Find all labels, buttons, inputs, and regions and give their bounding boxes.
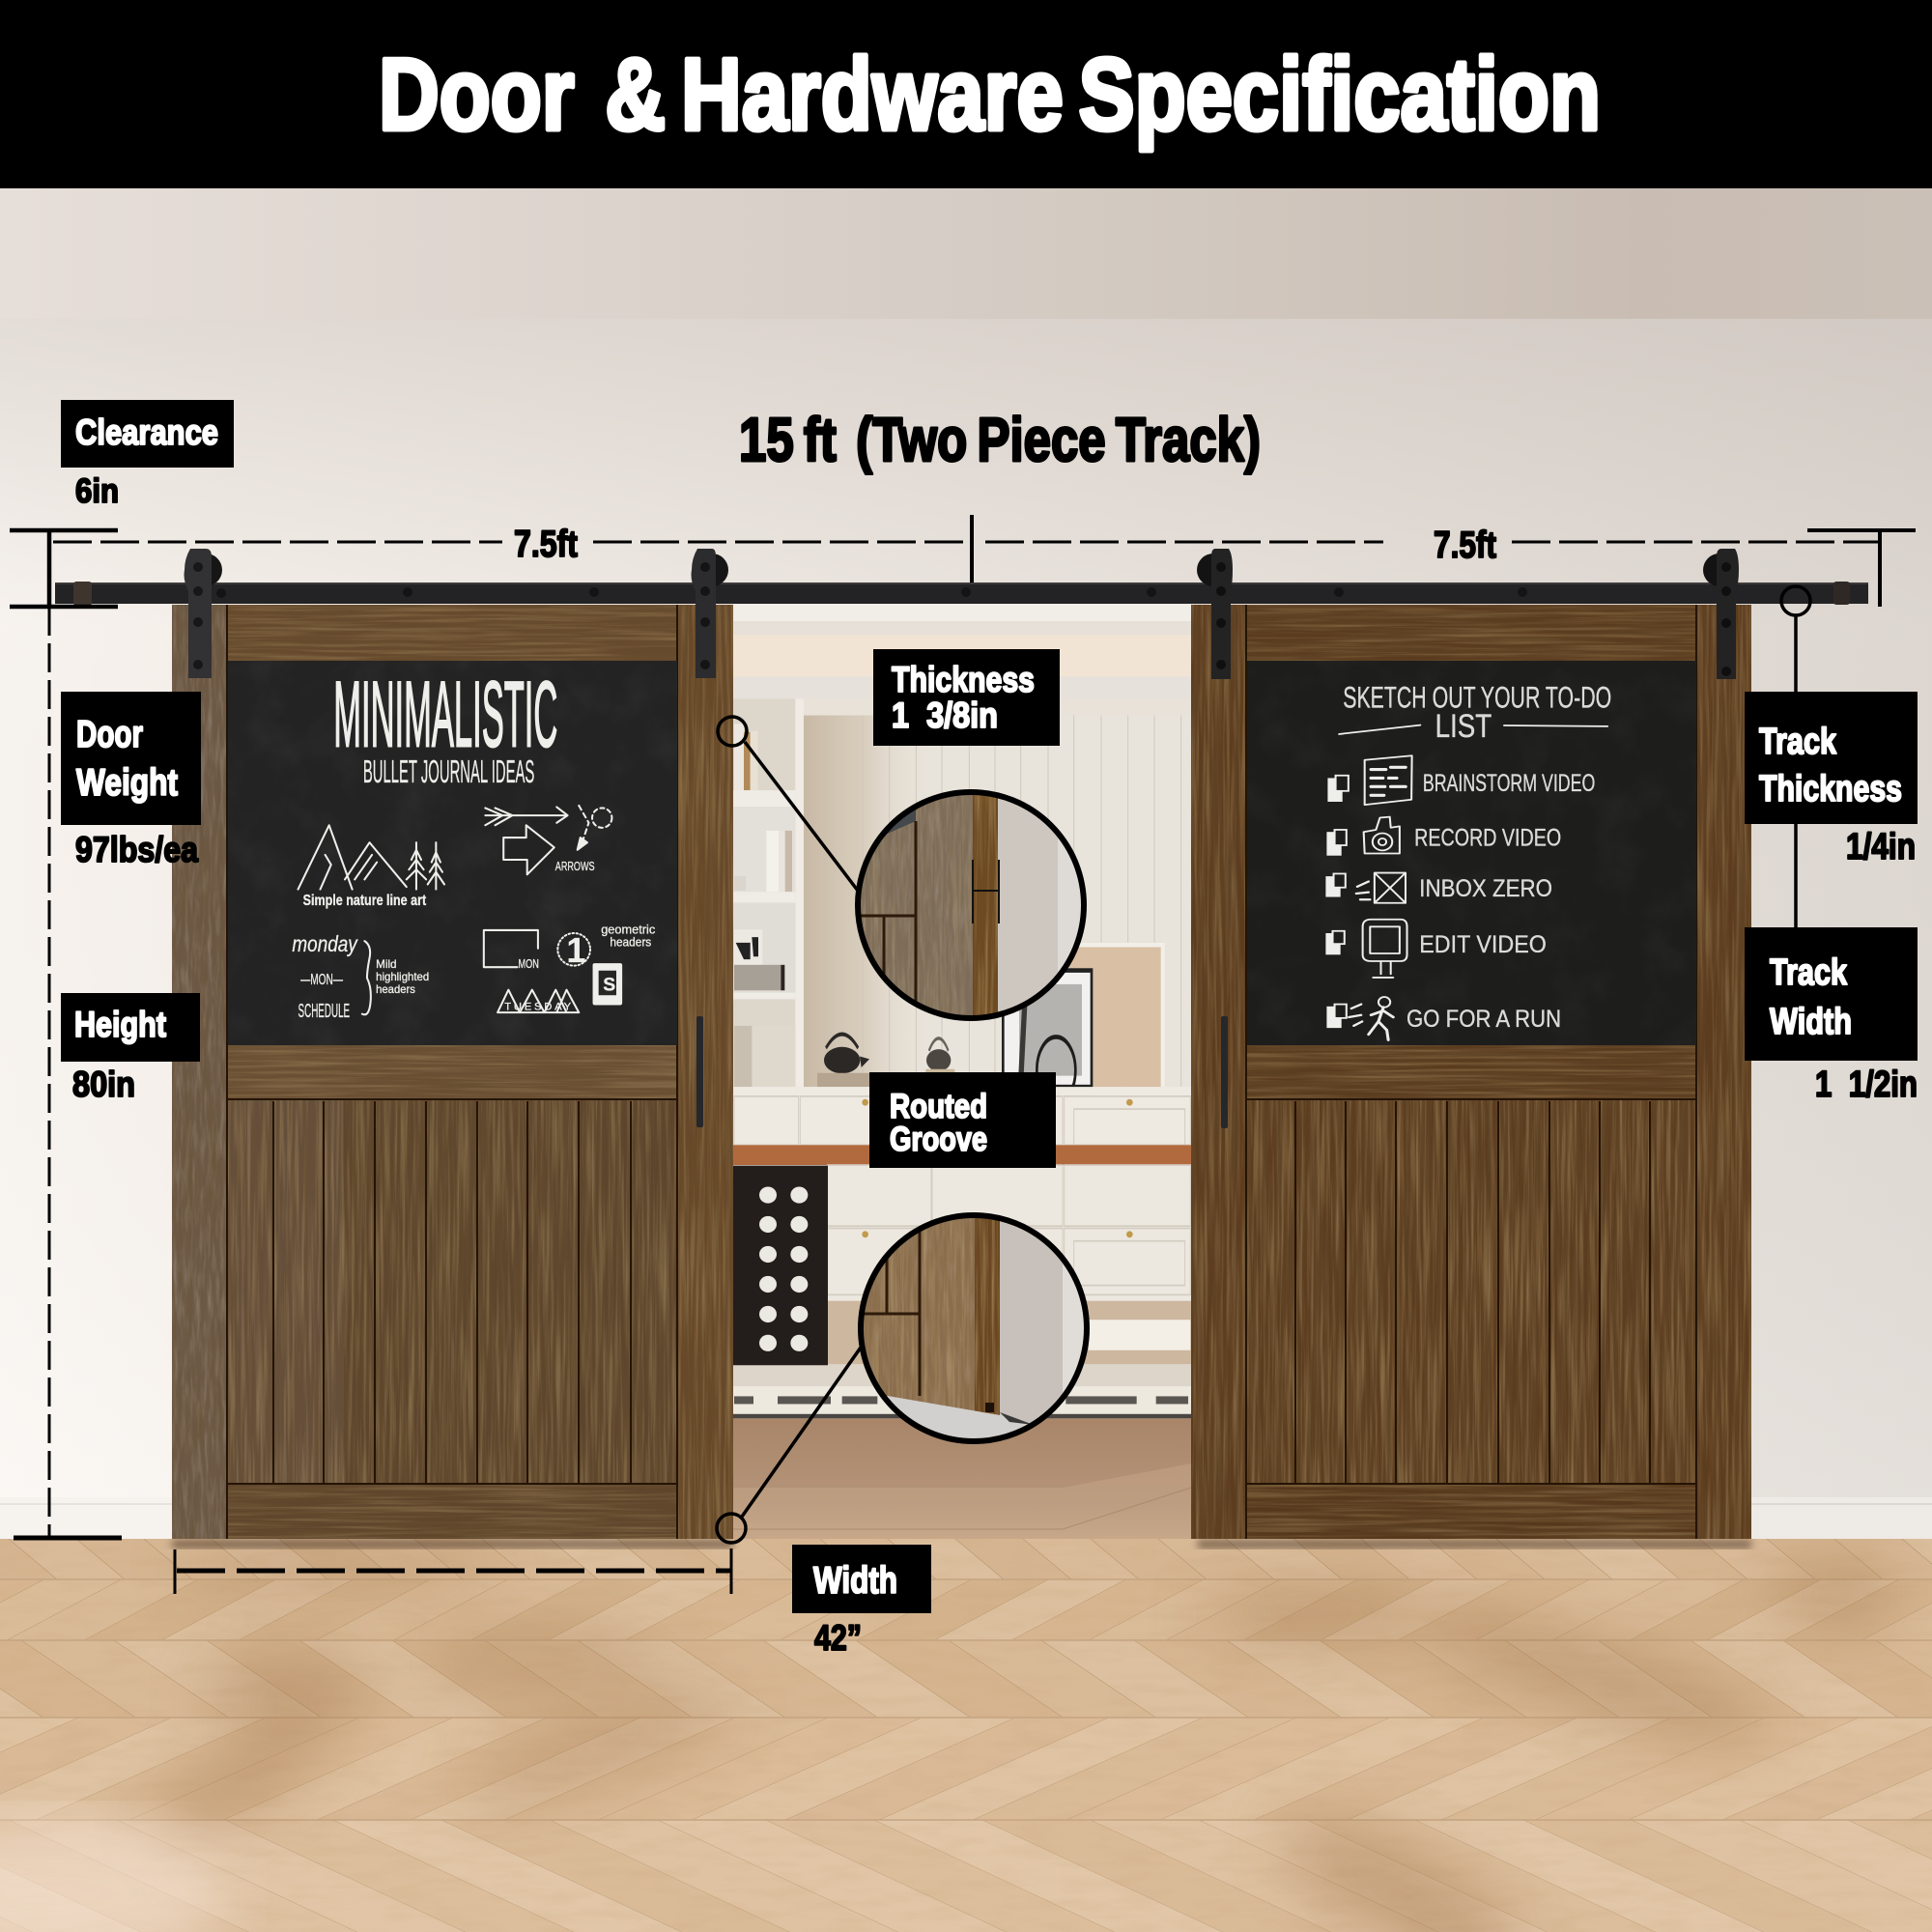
left door handle <box>696 1016 703 1127</box>
callout: routed groove: Routed <box>890 1088 987 1125</box>
chalk geometric headers sample: geometric <box>601 922 656 936</box>
left barn door <box>172 605 733 1539</box>
chalk schedule sample: headers <box>376 982 415 996</box>
title: Door & Hardware Specification <box>379 38 1601 152</box>
title bar <box>0 0 1932 188</box>
left door bottom rail <box>228 1484 677 1539</box>
hanger strap 1 <box>184 549 222 678</box>
chalk schedule sample: Mild <box>376 957 397 971</box>
background wall and ceiling <box>0 188 1932 1546</box>
callout: track thickness: Track <box>1759 722 1837 762</box>
chalkboard: sketch out your to-do list <box>1247 661 1696 1045</box>
chalk arrows <box>485 806 611 874</box>
to-do rows: RECORD VIDEO <box>1414 824 1561 851</box>
track length heading: 15 ft (Two Piece Track) <box>739 405 1261 474</box>
callout: thickness: Thickness <box>892 660 1035 699</box>
left door floor shadow <box>172 1540 733 1548</box>
leader: door bottom to groove magnifier <box>717 1345 863 1543</box>
dimension: 7.5 ft right segment: 7.5ft <box>1434 525 1496 566</box>
to-do rows: INBOX ZERO <box>1419 875 1552 902</box>
chalk geometric headers sample: 1 <box>566 931 585 970</box>
callout: track width: Width <box>1770 1002 1852 1042</box>
right door bottom rail <box>1246 1484 1696 1539</box>
chalk heading: list: LIST <box>1435 707 1492 745</box>
right door plank panel <box>1246 1099 1696 1484</box>
callout: routed groove: Groove <box>890 1121 987 1158</box>
right door stile right <box>1696 605 1751 1539</box>
chalk geometric headers sample: TUESDAY <box>504 1002 572 1013</box>
callout: height: Height <box>74 1005 166 1044</box>
hanger strap 3 <box>1197 549 1233 679</box>
left door plank panel <box>228 1099 677 1484</box>
right door handle <box>1221 1016 1228 1128</box>
chalk schedule sample: monday <box>292 931 358 956</box>
callout: routed groove <box>869 1072 1056 1168</box>
to-do rows: BRAINSTORM VIDEO <box>1423 769 1595 796</box>
dimension: track center tick <box>970 515 974 582</box>
callout: clearance <box>61 400 234 510</box>
chalk schedule sample: —MON— <box>300 972 343 988</box>
left door middle rail <box>228 1045 677 1099</box>
chalk geometric headers sample: headers <box>610 934 652 949</box>
chalk caption: simple nature line art: Simple nature line art <box>303 893 426 909</box>
callout: thickness: 1 3/8in <box>892 696 998 735</box>
callout: height: 80in <box>72 1065 135 1104</box>
interior room seen through the door opening <box>733 599 1191 1468</box>
dimension: 7.5 ft left segment: 7.5ft <box>514 524 578 565</box>
callout: width: Width <box>813 1560 897 1602</box>
leader: door edge to thickness magnifier <box>718 717 858 891</box>
callout: clearance: 6in <box>75 472 119 510</box>
hanger strap 4 <box>1703 549 1739 679</box>
right door top rail <box>1246 605 1696 661</box>
callout: door weight: Door <box>76 714 143 755</box>
floor inside the opening <box>733 1422 1191 1539</box>
track stop right <box>1833 582 1850 605</box>
chalk geometric headers sample: S <box>603 975 615 996</box>
callout: door weight: Weight <box>76 762 178 804</box>
callout: width: 42” <box>814 1618 862 1658</box>
chalkboard: minimalistic bullet journal ideas <box>228 661 677 1045</box>
chalk heading: list <box>1339 707 1607 745</box>
chalk mountains and trees <box>298 825 444 890</box>
right door stile left <box>1191 605 1246 1539</box>
chalk caption: arrows: ARROWS <box>555 859 595 873</box>
track stop left <box>73 582 92 606</box>
left door stile right <box>677 605 733 1539</box>
chalkboard: minimalistic bullet journal ideas: BULLET JOURNAL IDEAS <box>363 754 534 790</box>
right barn door <box>1191 605 1751 1539</box>
left door stile left <box>172 605 227 1539</box>
callout: track thickness <box>1745 692 1918 867</box>
to-do rows <box>1325 755 1595 1040</box>
callout: width <box>792 1545 931 1658</box>
callout connector: track <box>1781 586 1810 927</box>
right door middle rail <box>1246 1045 1696 1099</box>
chalk schedule sample <box>292 931 429 1022</box>
chalk geometric headers sample: MON <box>519 956 539 971</box>
callout: track thickness: 1/4in <box>1846 827 1916 867</box>
chalkboard: minimalistic bullet journal ideas: MINIMALISTIC <box>333 662 557 767</box>
callout: clearance: Clearance <box>75 412 218 452</box>
to-do rows: EDIT VIDEO <box>1419 931 1547 958</box>
left door top rail <box>228 605 677 661</box>
callout: thickness <box>873 649 1060 746</box>
dimension: clearance bracket <box>10 530 118 607</box>
chalk schedule sample: highlighted <box>376 970 429 983</box>
to-do rows: GO FOR A RUN <box>1406 1005 1561 1032</box>
callout: track width: Track <box>1770 952 1848 993</box>
height baseline tick <box>14 1536 122 1540</box>
callout: height <box>61 993 200 1104</box>
chalk schedule sample: SCHEDULE <box>298 1001 350 1022</box>
right door floor shadow <box>1198 1540 1751 1548</box>
hanger strap 2 <box>692 549 728 678</box>
chalk heading: sketch out your to-do: SKETCH OUT YOUR TO-DO <box>1343 681 1611 715</box>
dimension: height line <box>48 607 50 1536</box>
dimension: track end bracket <box>1807 530 1916 607</box>
magnifier: door thickness detail <box>850 787 1094 1019</box>
sliding track rail <box>55 582 1868 606</box>
callout: track width <box>1745 927 1918 1105</box>
dimension: door width <box>175 1548 731 1594</box>
callout: door weight: 97lbs/ea <box>75 830 198 869</box>
herringbone wood floor <box>0 1539 1932 1932</box>
chalk geometric headers sample <box>484 922 656 1013</box>
magnifier: routed groove detail <box>855 1212 1096 1444</box>
callout: door weight <box>61 692 201 869</box>
